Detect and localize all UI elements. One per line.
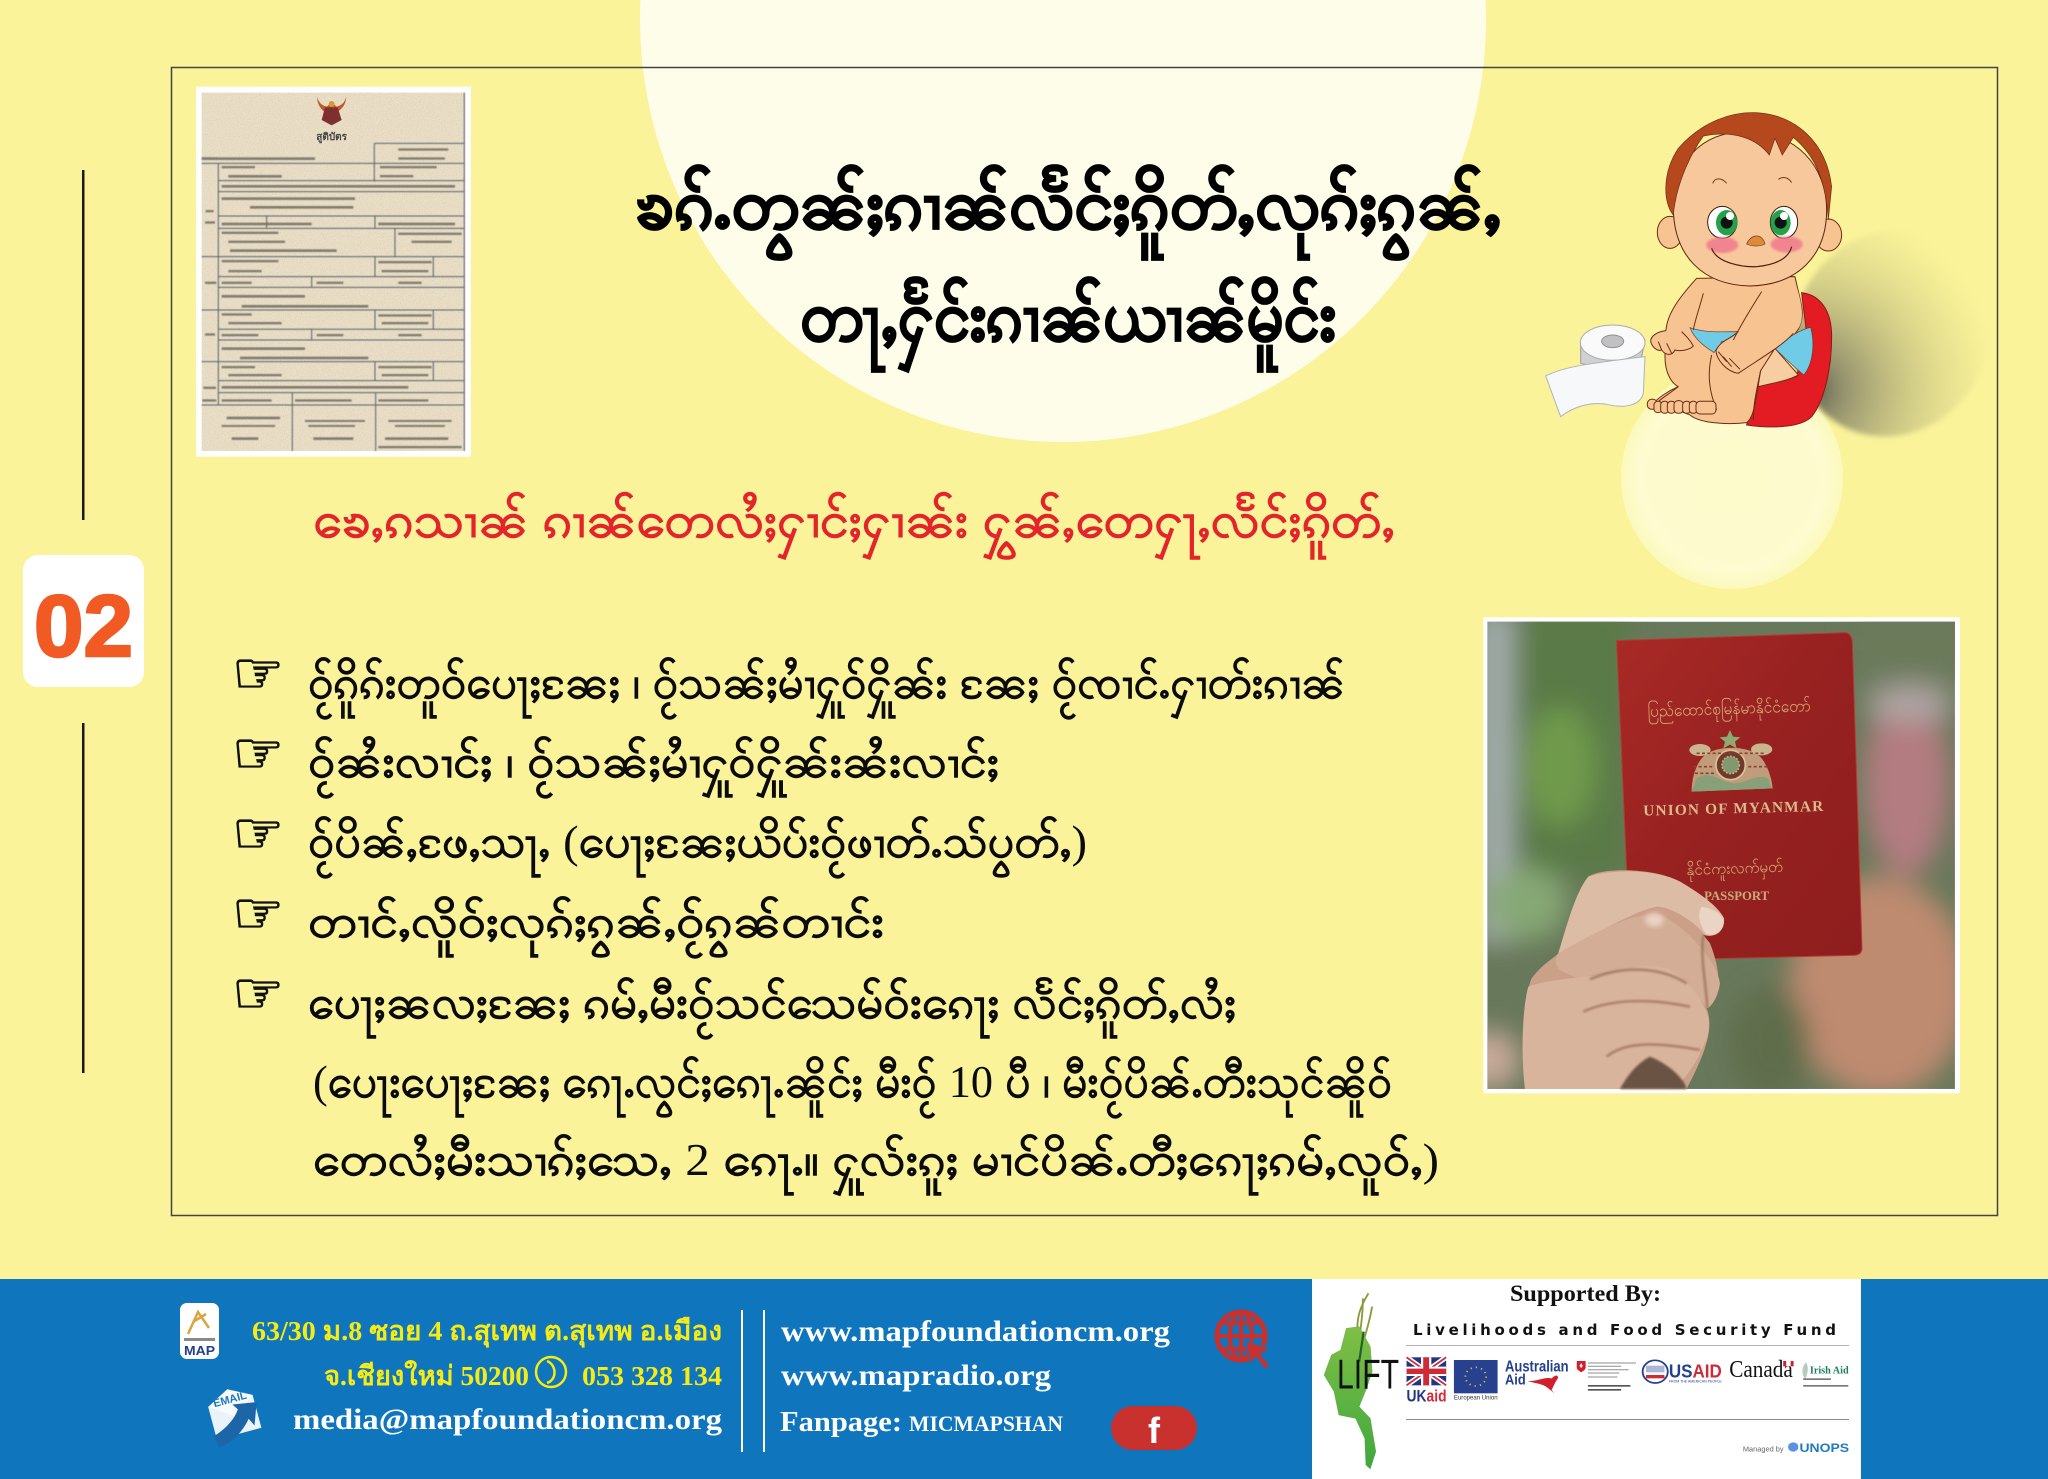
list lines: ဝႂ်ၼႆးလၢင်ႈ ၊ ဝႂ်သၼ်ႈမၢႆႁူဝ်ႁိူၼ်းၼႆးလၢင်ႈ [308,734,999,799]
list lines: (ပေႃးပေႃႈၼႄႈ ၵေႃႉလွင်ႈၵေႃႉၼိူင်ႈ မီးဝႂ် 10 ပီ ၊ မီးဝႂ်ပိၼ်ႉတီးသုင်ၼိူဝ် [313,1054,1392,1119]
rules [1406,1345,1849,1346]
managed by UNOPS: UNOPS [1800,1441,1849,1455]
bullet icons: ☞ [232,799,284,867]
icon: facebook: f [1148,1410,1161,1451]
email address: media@mapfoundationcm.org [293,1403,722,1436]
bullet icons: ☞ [232,879,284,947]
Canada: Canada [1729,1356,1793,1383]
icon: MAP foundation logo [180,1303,219,1359]
bullet icons: ☞ [232,719,284,787]
step number badge [23,555,144,687]
toilet roll [1546,325,1645,417]
garuda emblem [317,97,346,125]
toes [1647,399,1716,414]
image: passport held in hand [1460,610,1970,1100]
address: 63/30 ม.8 ซอย 4 ถ.สุเทพ ต.สุเทพ อ.เมือง [252,1316,722,1348]
hand [1523,870,1724,1089]
requirements list [232,639,1439,1197]
passport union text: UNION OF MYANMAR [1643,798,1824,820]
fund name: Livelihoods and Food Security Fund [1413,1321,1836,1339]
USAID: FROM THE AMERICAN PEOPLE [1669,1379,1722,1383]
ears [1657,216,1842,251]
Swiss agency [1577,1361,1636,1391]
nose [1747,236,1765,246]
side rule upper [82,170,84,520]
potty [1747,293,1832,427]
photo background [1487,622,1955,1089]
passport burmese title: ပြည်ထောင်စုမြန်မာနိုင်ငံတော် [1647,694,1811,725]
address: จ.เชียงใหม่ 50200 [324,1360,529,1391]
coat of arms [1689,730,1773,792]
icon: phone [536,1357,566,1387]
list lines: တၢင်ႇလိူဝ်ႈလုၵ်ႈၵွၼ်ႇဝႂ်ၵွၼ်တၢင်း [308,894,884,959]
icon: email [203,1383,265,1448]
arm and leg contour lines [1658,292,1793,420]
body and leg [1655,277,1802,424]
footer web links: MICMAPSHAN [909,1411,1063,1436]
hair [1666,113,1832,220]
sponsors panel [1312,1279,1861,1479]
potty shadow [1757,195,2026,471]
title [635,163,1501,374]
icon: facebook [1111,1406,1197,1451]
eyebrows [1713,178,1792,183]
title: ၶၵ်ႉတွၼ်ႈၵၢၼ်လႅင်ႈၵိူတ်ႇလုၵ်ႈၵွၼ်ႇ [635,163,1501,261]
list lines: တေလႆႈမီးသၢၵ်ႈသေႇ 2 ၵေႃႉ။ ႁူလ်းၵူႈ မၢင်ပိၼ်ႉတီႈၵေႃႈၵမ်ႇလူဝ်ႇ ) [313,1132,1439,1197]
EU flag [1454,1360,1498,1402]
USAID: USAID [1669,1362,1722,1382]
certificate heading: สูติบัตร [316,131,348,144]
side rule lower [82,723,84,1073]
address [252,1316,722,1391]
Irish Aid: Irish Aid [1810,1365,1849,1376]
icon: MAP foundation logo: MAP [184,1343,215,1358]
USAID [1643,1360,1722,1383]
managed by UNOPS: Managed by [1743,1445,1784,1454]
content frame [172,68,1998,1216]
footer contact block [180,1303,722,1448]
address: 053 328 134 [582,1361,722,1391]
image: birth certificate [196,87,471,457]
icon: globe with cursor [1217,1312,1270,1369]
title: တႃႇႁႅင်းၵၢၼ်ယၢၼ်မိူင်း [800,275,1336,374]
Australian Aid [1505,1358,1569,1393]
moon glow under baby [1621,367,1843,589]
footer web links: www.mapfoundationcm.org [781,1315,1170,1348]
Australian Aid: Aid [1505,1372,1526,1388]
decorative top circle [640,0,1486,442]
smile [1712,247,1792,267]
rear thigh [1757,348,1798,387]
footer web links [780,1315,1170,1438]
supported by heading: Supported By: [1510,1281,1661,1306]
diaper side [1775,327,1813,375]
bullet icons [232,639,284,1027]
list lines: ပေႃႈၼလႈၼႄႈ ၵမ်ႇမီးဝႂ်သင်သေမ်ဝ်းၵေႃႈ လႅင်ႈၵိူတ်ႇလႆႈ [308,975,1236,1040]
Irish Aid [1802,1362,1849,1387]
passport booklet [1617,633,1862,959]
subtitle: ၶေႇၵသၢၼ် ၵၢၼ်တေလႆႈႁၢင်ႈႁၢၼ်း ႁွၼ်ႇတေႁႃႇလႅင်ႈၵိူတ်ႇ [313,490,1395,561]
eyes [1708,206,1798,238]
Australian Aid: Australian [1505,1358,1569,1375]
hand outline [1716,332,1743,373]
step number badge: 02 [34,578,133,675]
head [1673,132,1827,286]
icon: email: EMAIL [212,1390,248,1410]
UK flag: UKaid [1407,1387,1447,1405]
passport word: PASSPORT [1704,889,1770,903]
left hand [1651,331,1693,354]
bullet icons: ☞ [232,959,284,1027]
list lines: ဝႂ်ပိၼ်ႇဖႄႇသႃႇ (ပေႃႈၼႄႈယိပ်းဝႂ်ဖၢတ်ႉသ်ပွတ်ႇ) [308,814,1087,879]
UK flag [1407,1357,1447,1405]
logo row [1324,1293,1849,1469]
footer web links: www.mapradio.org [781,1359,1051,1392]
EU flag: European Union [1454,1395,1498,1402]
bullet icons: ☞ [232,639,284,707]
diaper front [1690,328,1738,353]
right arm [1716,285,1802,372]
footer dividers [741,1310,765,1452]
cheeks [1706,237,1738,253]
certificate handwriting lines [202,148,462,448]
LIFT logo [1324,1293,1399,1469]
passport burmese word: နိုင်ငံကူးလက်မှတ် [1686,858,1784,882]
footer band [0,1279,2048,1479]
list lines: ဝႂ်ၵိူၵ်းတူဝ်ပေႃႈၼႄႈ ၊ ဝႂ်သၼ်ႈမၢႆႁူဝ်ႁိူၼ်း ၼႄႈ ဝႂ်ၸၢင်ႉႁၢတ်းၵၢၼ် [308,655,1345,720]
illustration: baby on potty [1546,113,2026,471]
footer web links: Fanpage: [780,1407,902,1438]
list lines [308,655,1439,1197]
LIFT logo: LIFT [1337,1351,1399,1398]
certificate table [202,93,464,451]
managed by UNOPS [1743,1441,1849,1455]
